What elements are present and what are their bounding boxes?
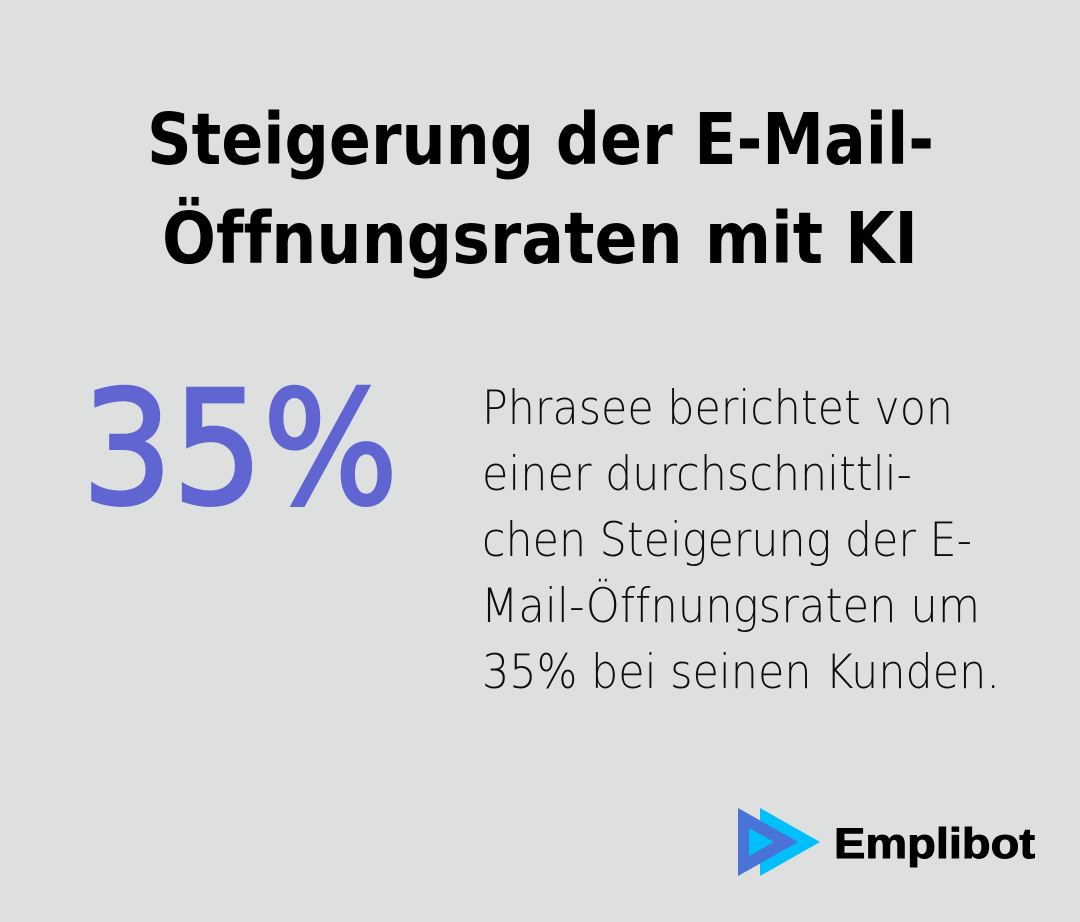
big statistic: 35%: 35% <box>82 358 398 541</box>
description text: einer durchschnittli- <box>482 447 912 502</box>
logo: Emplibot <box>738 808 1035 876</box>
title <box>147 98 934 280</box>
description text <box>481 381 1000 700</box>
title: Steigerung der E-Mail- <box>147 98 934 181</box>
description text: 35% bei seinen Kunden. <box>482 645 1000 700</box>
icon: play triangles <box>738 808 820 876</box>
description text: chen Steigerung der E- <box>482 513 972 568</box>
description text: Phrasee berichtet von <box>482 381 953 436</box>
wordmark: Emplibot <box>834 820 1035 868</box>
description text: Mail-Öffnungsraten um <box>481 579 980 634</box>
title: Öffnungsraten mit KI <box>162 197 918 280</box>
